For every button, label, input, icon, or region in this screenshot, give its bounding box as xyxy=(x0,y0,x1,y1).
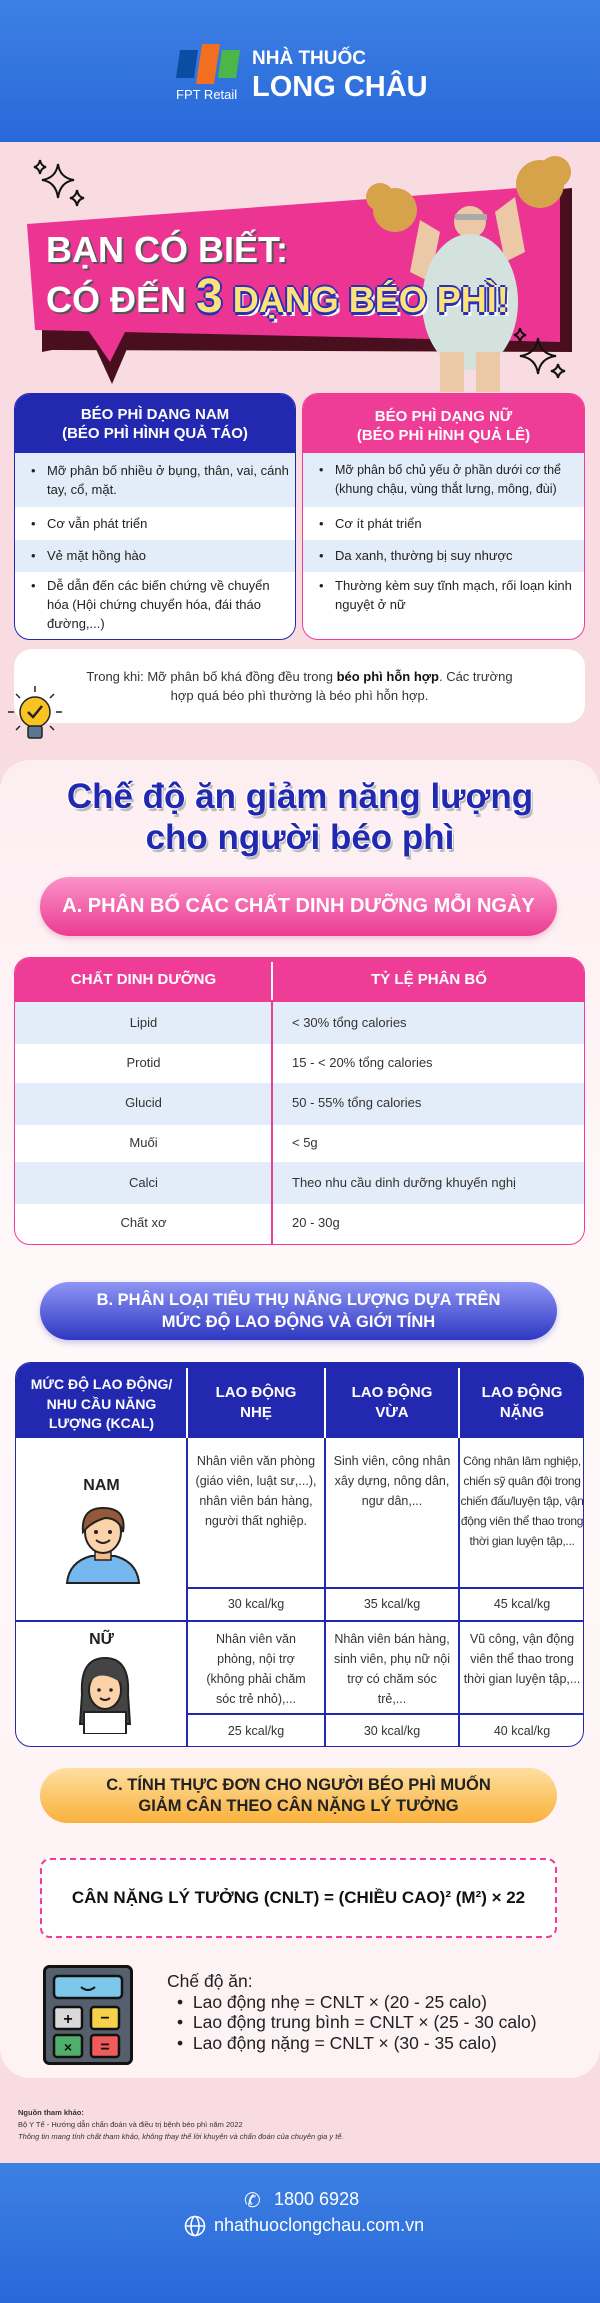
icon: globe xyxy=(184,2216,206,2236)
title: chế độ ăn giảm năng lượng xyxy=(67,777,533,860)
panel: béo phì dạng nữ: Mỡ phân bố chủ yếu ở phần dưới cơ thể (khung chậu, vùng thắt lưng, mông, đùi) xyxy=(335,463,561,496)
table: phân bố chất dinh dưỡng: TỶ LỆ PHÂN BỐ xyxy=(371,971,487,988)
heading nam xyxy=(15,394,295,453)
icon: male avatar xyxy=(66,1507,140,1584)
formula box xyxy=(40,1858,557,1938)
source note xyxy=(18,2108,344,2141)
nữ label: NỮ xyxy=(89,1631,114,1648)
icon: calculator: + xyxy=(63,2011,73,2028)
icon: calculator xyxy=(43,1965,133,2065)
character xyxy=(366,156,571,392)
table: năng lượng theo lao động: Công nhân lâm nghiệp, chiến sỹ quân đội trong chiến đấu/luyện tập, vận động viên thể thao trong thời gian luyện tập,... xyxy=(461,1454,583,1548)
panel: béo phì dạng nam: Mỡ phân bố nhiều ở bụng, thân, vai, cánh tay, cổ, mặt. xyxy=(47,463,289,497)
title: chế độ ăn giảm năng lượng: cho người béo phì xyxy=(146,818,454,857)
table: phân bố chất dinh dưỡng xyxy=(14,957,585,1245)
banner title: CÓ ĐẾN 3 DẠNG BÉO PHÌ! xyxy=(46,270,509,323)
table: phân bố chất dinh dưỡng: Muối xyxy=(129,1135,158,1150)
table: năng lượng theo lao động xyxy=(15,1362,584,1747)
icon: light bulb xyxy=(8,686,62,739)
panel: chế độ ăn (white) xyxy=(0,760,600,2078)
banner title: BẠN CÓ BIẾT: xyxy=(46,229,288,270)
table: phân bố chất dinh dưỡng: Glucid xyxy=(125,1095,162,1110)
banner: bạn có biết xyxy=(27,156,572,392)
heading nam: BÉO PHÌ DẠNG NAM xyxy=(81,406,229,423)
title: chế độ ăn giảm năng lượng: Chế độ ăn giảm năng lượng xyxy=(67,777,533,816)
heading nữ: BÉO PHÌ DẠNG NỮ xyxy=(375,408,512,425)
icon: calculator: × xyxy=(64,2039,72,2055)
table: năng lượng theo lao động: LAO ĐỘNG xyxy=(482,1384,562,1401)
panel: béo phì dạng nữ: Da xanh, thường bị suy nhược xyxy=(335,548,513,563)
table: năng lượng theo lao động: NHẸ xyxy=(240,1404,272,1421)
brand name: LONG CHÂU xyxy=(252,71,428,103)
table: năng lượng theo lao động: 30 kcal/kg xyxy=(364,1724,420,1738)
heading nam: (BÉO PHÌ HÌNH QUẢ TÁO) xyxy=(62,425,248,442)
table: năng lượng theo lao động: 25 kcal/kg xyxy=(228,1724,284,1738)
table: phân bố chất dinh dưỡng: CHẤT DINH DƯỠNG xyxy=(71,971,216,988)
table: năng lượng theo lao động: Nhân viên văn phòng (giáo viên, luật sư,...), nhân viên bán hàng, người thất nghiệp. xyxy=(196,1454,316,1528)
icon: phone: ✆ xyxy=(244,2190,261,2212)
table: năng lượng theo lao động: LAO ĐỘNG xyxy=(216,1384,296,1401)
header bar xyxy=(0,0,600,142)
table: năng lượng theo lao động: LƯỢNG (KCAL) xyxy=(49,1415,154,1431)
source note: Nguồn tham khảo: xyxy=(18,2108,84,2117)
panel: béo phì dạng nữ: Cơ ít phát triển xyxy=(335,516,422,531)
brand name: NHÀ THUỐC xyxy=(252,48,366,69)
pill: B: B. PHÂN LOẠI TIÊU THỤ NĂNG LƯỢNG DỰA TRÊN xyxy=(97,1291,500,1309)
pill: B: MỨC ĐỘ LAO ĐỘNG VÀ GIỚI TÍNH xyxy=(162,1313,435,1331)
footer xyxy=(0,2163,600,2303)
banner title xyxy=(46,229,509,323)
text: chế độ ăn: • Lao động nhẹ = CNLT × (20 - 25 calo) xyxy=(177,1992,487,2012)
table: năng lượng theo lao động: 30 kcal/kg xyxy=(228,1597,284,1611)
table: năng lượng theo lao động: 35 kcal/kg xyxy=(364,1597,420,1611)
panel: béo phì dạng nam xyxy=(14,393,296,640)
table: phân bố chất dinh dưỡng: 15 - < 20% tổng calories xyxy=(292,1055,433,1070)
table: năng lượng theo lao động: 40 kcal/kg xyxy=(494,1724,550,1738)
table: năng lượng theo lao động: 45 kcal/kg xyxy=(494,1597,550,1611)
table: phân bố chất dinh dưỡng: Lipid xyxy=(130,1015,157,1030)
grid lines xyxy=(186,1368,188,1748)
icon: calculator: − xyxy=(100,2010,110,2027)
source note: Bộ Y Tế - Hướng dẫn chẩn đoán và điều trị bệnh béo phì năm 2022 xyxy=(18,2120,243,2129)
text: chế độ ăn xyxy=(167,1971,537,2052)
phone number: 1800 6928 xyxy=(274,2189,359,2209)
table: năng lượng theo lao động: MỨC ĐỘ LAO ĐỘNG/ xyxy=(31,1376,172,1392)
table: phân bố chất dinh dưỡng: Calci xyxy=(129,1175,158,1190)
callout: béo phì hỗn hợp: Trong khi: Mỡ phân bố khá đồng đều trong béo phì hỗn hợp. Các trường hợp quá béo phì thường là béo phì hỗn hợp. xyxy=(86,669,513,703)
pill: C xyxy=(40,1768,557,1823)
table: phân bố chất dinh dưỡng: Theo nhu cầu dinh dưỡng khuyến nghị xyxy=(292,1175,516,1190)
table: năng lượng theo lao động: LAO ĐỘNG xyxy=(352,1384,432,1401)
nam label: NAM xyxy=(83,1477,120,1494)
formula box: CÂN NẶNG LÝ TƯỞNG (CNLT) = (CHIỀU CAO)² (M²) × 22 xyxy=(72,1888,525,1907)
logo: FPT Retail xyxy=(176,87,237,102)
table: năng lượng theo lao động: Vũ công, vận động viên thể thao trong thời gian luyện tập,... xyxy=(464,1632,580,1686)
brand name xyxy=(252,46,428,103)
text: chế độ ăn: Chế độ ăn: xyxy=(167,1971,253,1991)
pill: B xyxy=(40,1282,557,1340)
table: năng lượng theo lao động: VỪA xyxy=(375,1404,409,1421)
heading nữ: (BÉO PHÌ HÌNH QUẢ LÊ) xyxy=(357,427,530,444)
heading nữ xyxy=(303,394,584,453)
logo xyxy=(176,44,428,103)
icon: FPT logo xyxy=(176,44,240,84)
table: phân bố chất dinh dưỡng: 20 - 30g xyxy=(292,1215,340,1230)
pill: A: A. PHÂN BỐ CÁC CHẤT DINH DƯỠNG MỖI NGÀY xyxy=(62,895,535,917)
callout: béo phì hỗn hợp xyxy=(14,649,585,723)
panel: béo phì dạng nam: Vẻ mặt hồng hào xyxy=(47,548,146,563)
icon: female avatar xyxy=(78,1657,132,1734)
panel: béo phì dạng nữ xyxy=(302,393,585,640)
sparkle top-left xyxy=(34,160,84,206)
table: năng lượng theo lao động: NẶNG xyxy=(500,1404,544,1421)
text: chế độ ăn: • Lao động nặng = CNLT × (30 - 35 calo) xyxy=(177,2032,497,2052)
panel: béo phì dạng nữ: Thường kèm suy tĩnh mạch, rối loạn kinh nguyệt ở nữ xyxy=(335,578,572,612)
table: phân bố chất dinh dưỡng: Chất xơ xyxy=(120,1215,167,1230)
panel: béo phì dạng nam: Cơ vẫn phát triển xyxy=(47,516,147,531)
table: năng lượng theo lao động: Nhân viên văn phòng, nội trợ (không phải chăm sóc trẻ nhỏ),... xyxy=(206,1632,306,1706)
table: năng lượng theo lao động: Sinh viên, công nhân xây dựng, nông dân, ngư dân,... xyxy=(334,1454,450,1508)
icon: calculator: = xyxy=(100,2039,110,2056)
table: phân bố chất dinh dưỡng: < 5g xyxy=(292,1135,318,1150)
table: phân bố chất dinh dưỡng: 50 - 55% tổng calories xyxy=(292,1095,421,1110)
source note: Thông tin mang tính chất tham khảo, không thay thế lời khuyên và chẩn đoán của chuyên gia y tế. xyxy=(18,2132,344,2141)
table: phân bố chất dinh dưỡng: Protid xyxy=(127,1055,160,1070)
pill: C: C. TÍNH THỰC ĐƠN CHO NGƯỜI BÉO PHÌ MUỐN xyxy=(106,1776,491,1794)
text: chế độ ăn: • Lao động trung bình = CNLT × (25 - 30 calo) xyxy=(177,2012,537,2032)
pill: A xyxy=(40,877,557,936)
sparkle bottom-right xyxy=(514,328,565,378)
panel: béo phì dạng nam: Dễ dẫn đến các biến chứng về chuyển hóa (Hội chứng chuyển hóa, đái tháo đường,...) xyxy=(47,578,270,631)
table: năng lượng theo lao động: Nhân viên bán hàng, sinh viên, phụ nữ nội trợ có chăm sóc trẻ,... xyxy=(334,1632,450,1706)
table: năng lượng theo lao động: NHU CẦU NĂNG xyxy=(47,1396,156,1412)
table: phân bố chất dinh dưỡng: < 30% tổng calories xyxy=(292,1015,407,1030)
website: nhathuoclongchau.com.vn xyxy=(214,2215,424,2235)
pill: C: GIẢM CÂN THEO CÂN NẶNG LÝ TƯỞNG xyxy=(138,1796,459,1814)
